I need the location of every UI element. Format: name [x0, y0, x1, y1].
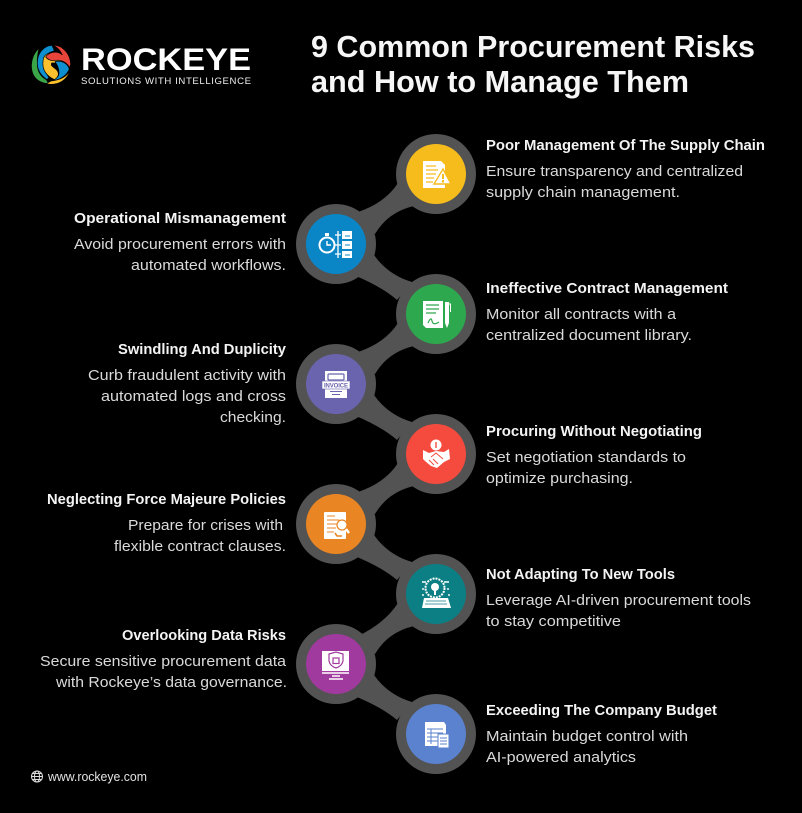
text: ineffective contract management: Monitor all contracts with a	[486, 307, 677, 323]
text: overlooking data risks: Overlooking Data Risks	[122, 628, 286, 644]
logo	[31, 41, 251, 87]
text: not adapting to new tools: to stay competitive	[486, 614, 621, 630]
text: overlooking data risks: with Rockeye’s data governance.	[55, 675, 287, 691]
text: poor management of the supply chain: Poor Management Of The Supply Chain	[486, 138, 765, 154]
logo wordmark: ROCKEYE	[81, 41, 251, 77]
text: swindling and duplicity: Curb fraudulent activity with	[88, 368, 286, 384]
icon: logo swirl	[31, 45, 71, 84]
text: not adapting to new tools	[486, 567, 751, 630]
text: neglecting force majeure policies	[47, 492, 286, 555]
text: operational mismanagement: Avoid procurement errors with	[74, 237, 286, 253]
text: neglecting force majeure policies: Neglecting Force Majeure Policies	[47, 492, 286, 508]
connector path	[296, 134, 476, 774]
text: not adapting to new tools: Not Adapting To New Tools	[486, 567, 675, 583]
text: operational mismanagement	[74, 211, 286, 274]
text: procuring without negotiating: optimize purchasing.	[486, 471, 633, 487]
website url: www.rockeye.com	[47, 770, 147, 784]
text: neglecting force majeure policies: Prepare for crises with	[128, 518, 283, 534]
text: swindling and duplicity: Swindling And Duplicity	[118, 342, 286, 358]
text: ineffective contract management: Ineffective Contract Management	[486, 281, 728, 297]
text: ineffective contract management: centralized document library.	[486, 328, 692, 344]
text: exceeding the company budget	[486, 703, 717, 766]
text: exceeding the company budget: AI-powered analytics	[486, 750, 636, 766]
icon: handshake with coin	[406, 424, 466, 484]
logo tagline: SOLUTIONS WITH INTELLIGENCE	[81, 76, 251, 87]
icon: globe	[32, 771, 42, 782]
title	[311, 29, 755, 99]
icon: invoice: INVOICE	[324, 384, 348, 390]
text: ineffective contract management	[486, 281, 728, 344]
text: swindling and duplicity: automated logs and cross	[101, 389, 286, 405]
text: exceeding the company budget: Exceeding The Company Budget	[486, 703, 717, 719]
text: procuring without negotiating: Procuring Without Negotiating	[486, 424, 702, 440]
text: procuring without negotiating: Set negotiation standards to	[486, 450, 686, 466]
icon: AI laptop with lightbulb	[406, 564, 466, 624]
text: operational mismanagement: automated workflows.	[131, 258, 286, 274]
text: poor management of the supply chain	[486, 138, 765, 201]
text: neglecting force majeure policies: flexible contract clauses.	[114, 539, 286, 555]
icon: force majeure document review	[306, 494, 366, 554]
icon: contract and pen	[406, 284, 466, 344]
text: overlooking data risks	[40, 628, 287, 691]
icon: supply chain warning document	[406, 144, 466, 204]
title: and How to Manage Them	[311, 64, 689, 99]
text: exceeding the company budget: Maintain budget control with	[486, 729, 688, 745]
text: poor management of the supply chain: supply chain management.	[486, 185, 680, 201]
text: procuring without negotiating	[486, 424, 702, 487]
icon: secure monitor with shield	[306, 634, 366, 694]
text: operational mismanagement: Operational Mismanagement	[74, 211, 286, 227]
icon: stopwatch and workflow	[306, 214, 366, 274]
text: overlooking data risks: Secure sensitive procurement data	[40, 654, 287, 670]
icon: invoice	[306, 354, 366, 414]
icon: budget document and calculator	[406, 704, 466, 764]
text: swindling and duplicity	[88, 342, 286, 426]
text: not adapting to new tools: Leverage AI-driven procurement tools	[486, 593, 751, 609]
title: 9 Common Procurement Risks	[311, 29, 755, 64]
text: poor management of the supply chain: Ensure transparency and centralized	[486, 164, 743, 180]
footer website	[32, 770, 147, 784]
text: swindling and duplicity: checking.	[220, 410, 286, 426]
